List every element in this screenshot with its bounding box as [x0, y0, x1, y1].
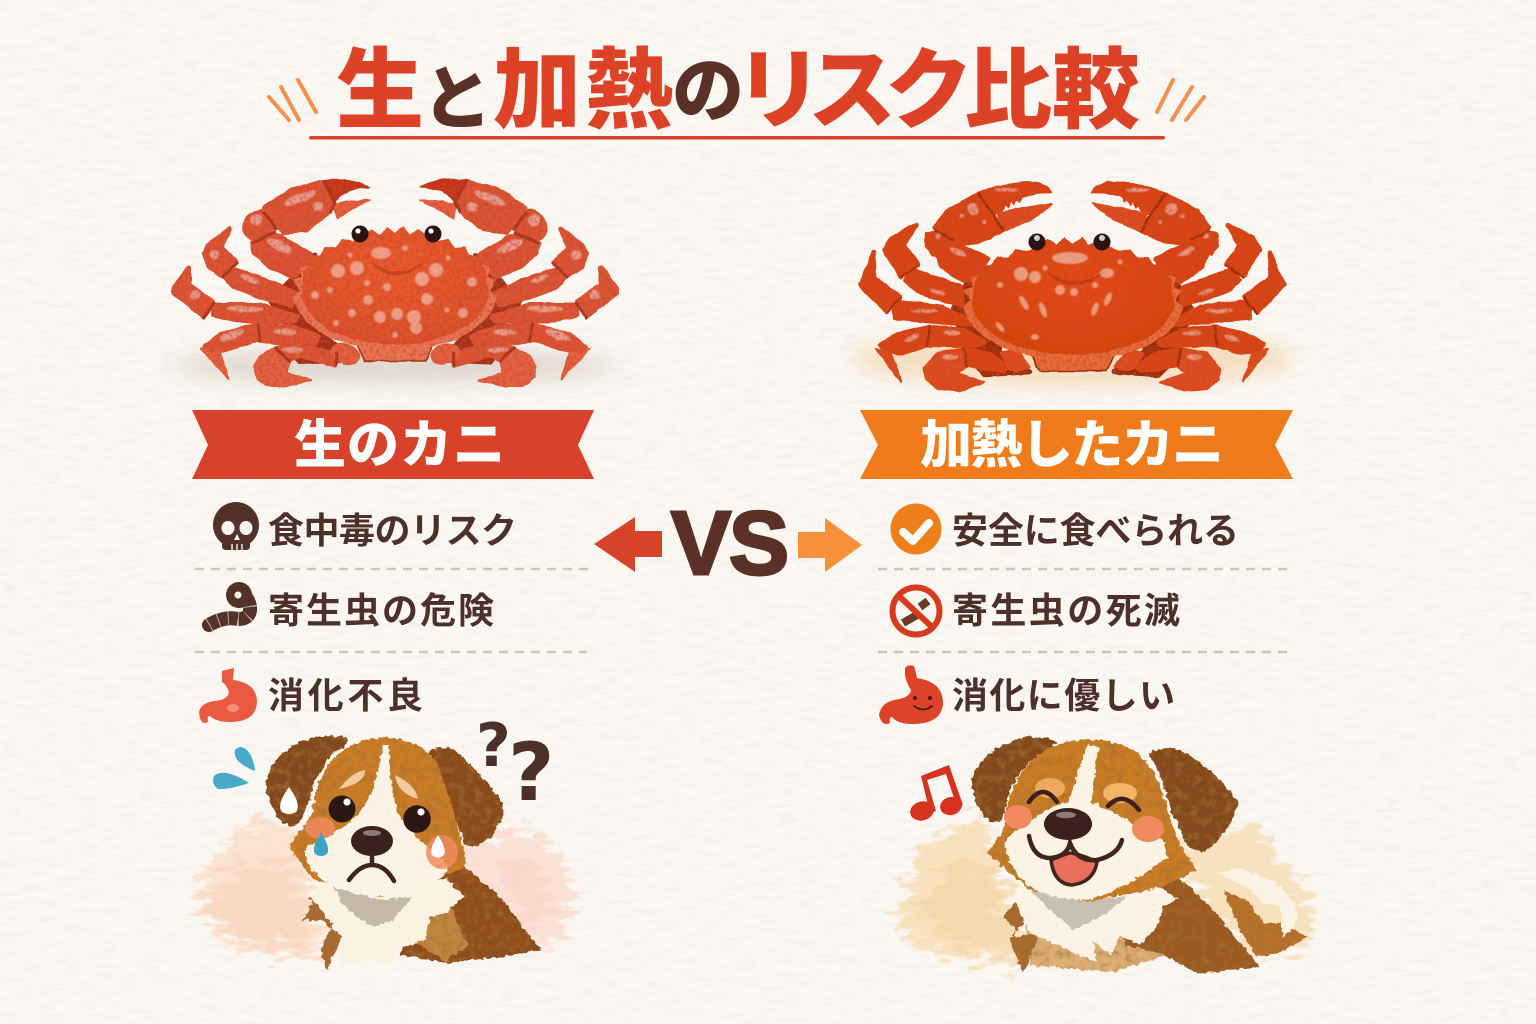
- title: [269, 41, 1204, 140]
- list: cooked crab benefits: [878, 504, 1290, 724]
- crab body and legs: [174, 179, 616, 386]
- title text: リ: [735, 41, 823, 140]
- dog face: [1004, 778, 1164, 885]
- dog body: [987, 853, 1260, 973]
- dog head: [987, 739, 1197, 902]
- brows: [1035, 778, 1065, 798]
- left accent ticks: [269, 80, 316, 120]
- icon: skull: [213, 502, 259, 550]
- icon: worm: [209, 582, 252, 625]
- ribbon label: 加熱したカニ: [920, 417, 1224, 475]
- dog chest ruff: [308, 878, 463, 968]
- item text: 安全に食べられる: [952, 510, 1239, 551]
- dog ears: [266, 736, 503, 846]
- white tear: [431, 835, 445, 858]
- vs divider: [594, 494, 862, 594]
- smile: [1029, 836, 1122, 860]
- shell highlights: [994, 252, 1122, 340]
- ribbon: raw crab: [192, 410, 594, 479]
- cheeks: [1004, 805, 1032, 829]
- crab shadow: [170, 350, 620, 382]
- cheeks: [305, 817, 335, 839]
- title text: 加: [493, 41, 581, 140]
- dog white face: [305, 745, 450, 896]
- watercolor splash: [192, 817, 573, 953]
- dog chest ruff: [1013, 880, 1178, 963]
- tongue: [1051, 853, 1097, 885]
- dog body: [288, 843, 541, 970]
- dog head: [290, 738, 466, 897]
- blue sweat drops: [213, 747, 255, 789]
- dog ears: [972, 737, 1237, 852]
- crab eyes: [352, 226, 442, 242]
- title text: ス: [808, 41, 896, 140]
- happy dog illustration: [897, 737, 1313, 973]
- item text: 食中毒のリスク: [268, 510, 517, 551]
- title text: 比: [964, 41, 1052, 140]
- item text: 消化不良: [268, 675, 423, 716]
- brows: [339, 770, 418, 799]
- ribbon: cooked crab: [860, 410, 1293, 479]
- item text: 寄生虫の死滅: [952, 590, 1180, 631]
- white sweat drop: [280, 787, 298, 814]
- music note: [908, 765, 964, 823]
- title text: 生: [336, 41, 424, 140]
- closed happy eyes: [1029, 792, 1139, 810]
- question marks: [476, 711, 554, 819]
- eyes: [328, 796, 356, 822]
- crab eyes: [1028, 234, 1110, 250]
- watercolor splash: [897, 813, 1313, 965]
- arrow: left red: [594, 517, 662, 572]
- vs text: VS: [671, 494, 789, 594]
- sad dog illustration: [192, 711, 573, 970]
- arrow: right orange: [798, 518, 862, 572]
- ribbon label: 生のカニ: [294, 417, 505, 475]
- title text: と: [422, 60, 492, 138]
- title underline: [309, 136, 1165, 140]
- crab warm shadow: [851, 330, 1295, 386]
- dog face: [280, 770, 458, 881]
- question marks: ?: [476, 711, 511, 781]
- raw crab illustration: [170, 179, 620, 386]
- shell highlights: [311, 245, 477, 338]
- title text: 熱: [585, 41, 673, 140]
- icon: check circle: [890, 504, 942, 554]
- icon: no parasite: [892, 588, 940, 634]
- dog tail: [1223, 890, 1307, 957]
- title text: の: [672, 52, 744, 132]
- blue tear: [314, 833, 328, 856]
- nose: [1044, 808, 1092, 840]
- title text: 較: [1052, 41, 1140, 140]
- nose: [351, 826, 393, 856]
- item text: 寄生虫の危険: [268, 590, 494, 631]
- crab body and legs: [860, 182, 1284, 391]
- right accent ticks: [1157, 80, 1204, 120]
- title text: ク: [885, 41, 973, 140]
- dog white face: [1004, 745, 1168, 900]
- item text: 消化に優しい: [952, 675, 1175, 716]
- icon: happy stomach: [879, 665, 943, 724]
- question marks: ?: [508, 726, 554, 819]
- icon: stomach: [199, 668, 257, 723]
- list: raw crab risks: [195, 502, 590, 723]
- cooked crab illustration: [851, 182, 1295, 391]
- dog tail white tip: [1217, 868, 1298, 938]
- mouth: [349, 855, 394, 881]
